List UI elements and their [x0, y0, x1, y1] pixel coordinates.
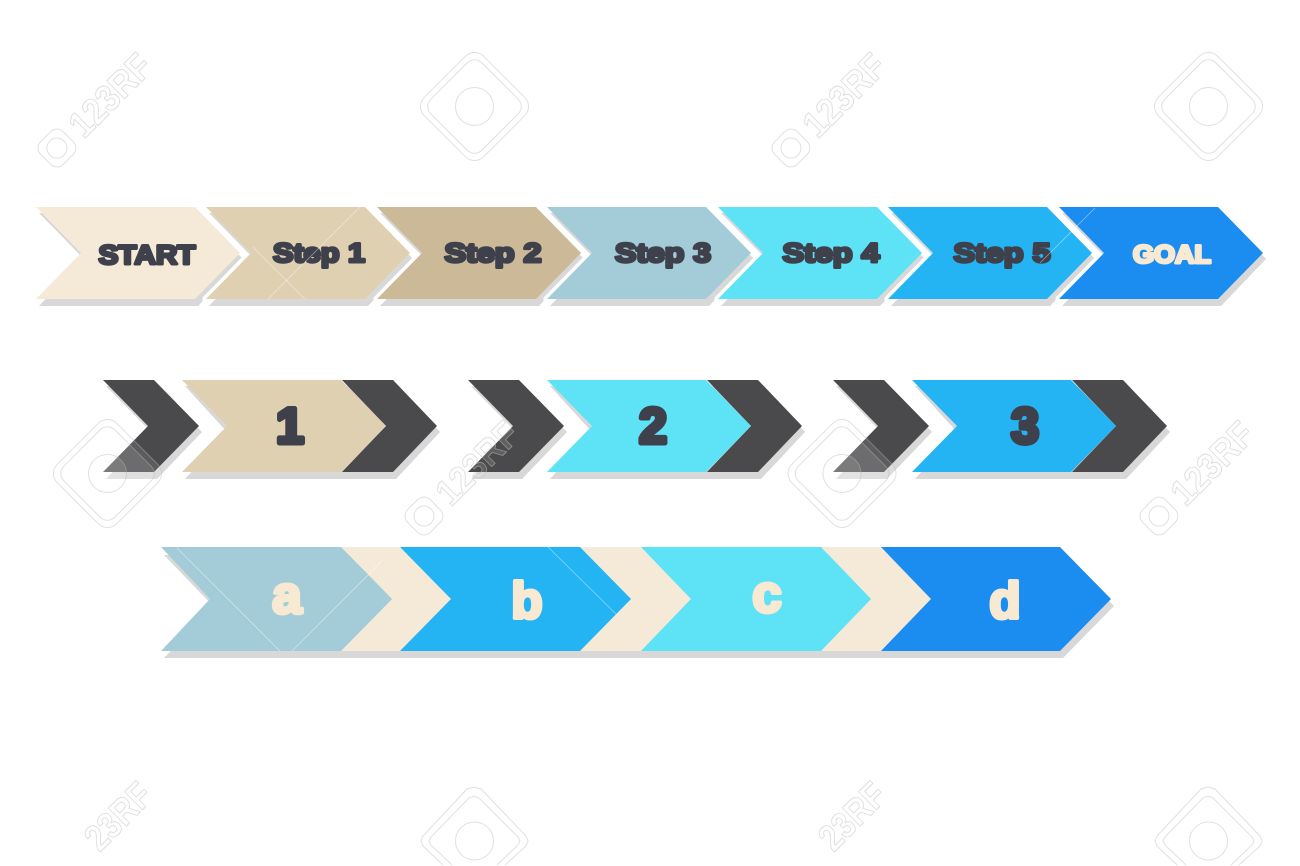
arrow: Step 5: [888, 207, 1095, 306]
arrow group: b: b: [511, 572, 543, 629]
arrow group: 3: 3: [1011, 398, 1039, 454]
arrow: Step 3: Step 3: [615, 238, 711, 268]
arrow group: a: [161, 547, 1114, 658]
watermark: logo middle 2: [1134, 414, 1262, 542]
arrow: Step 1: Step 1: [273, 238, 365, 268]
watermark: egg middle 1: [48, 414, 167, 533]
arrow group: c: c: [752, 565, 782, 624]
panel: top process row, start to goal: [36, 207, 1266, 306]
arrow group: 1: 1: [276, 398, 304, 454]
watermark: egg bottom 1, cut by the frame: [421, 787, 528, 865]
watermark: egg top 1: [415, 47, 534, 166]
arrow: Step 2: [377, 207, 584, 306]
arrow: Step 2: Step 2: [444, 238, 542, 268]
arrow: Step 1: [206, 207, 413, 306]
watermark: logo bottom 2, cut by the frame: 23RF: [810, 774, 894, 858]
arrow: Step 4: [718, 207, 925, 306]
arrow: Step 4: Step 4: [782, 238, 880, 268]
arrow: GOAL: [1059, 207, 1266, 306]
watermark: logo bottom left, cut by the frame: 23RF: [76, 774, 160, 858]
watermark: egg bottom 2, cut by the frame: [1155, 787, 1262, 865]
panel: middle row, numbered arrows: [103, 380, 1170, 479]
watermark: egg top 2: [1149, 47, 1268, 166]
watermark: logo middle 1: [399, 414, 527, 542]
watermark: logo top 2: 123RF: [795, 46, 894, 145]
watermark: logo top left: [32, 46, 160, 174]
arrow: START: [36, 207, 243, 306]
watermark: egg middle 2: [783, 414, 901, 533]
arrow: Step 3: [547, 207, 754, 306]
watermark: logo top left: 123RF: [61, 46, 160, 145]
panel: bottom row, lettered arrows: [161, 547, 1114, 658]
watermark: logo middle 2: 123RF: [1163, 414, 1262, 513]
arrow group: 2: [468, 380, 805, 479]
arrow group: 3: [833, 380, 1170, 479]
watermark: logo top 2: [766, 46, 894, 174]
arrow group: c: [641, 547, 931, 651]
arrow group: b: [400, 547, 691, 651]
arrow group: a: a: [272, 566, 302, 625]
watermark: logo middle 1: 123RF: [428, 414, 527, 513]
arrow: Step 5: Step 5: [954, 238, 1050, 268]
arrow: GOAL: GOAL: [1133, 241, 1211, 269]
arrow group: 2: 2: [639, 398, 667, 454]
arrow group: d: d: [989, 572, 1021, 629]
arrow: START: START: [98, 240, 196, 270]
arrow group: d: [881, 547, 1111, 651]
arrow group: 1: [103, 380, 440, 479]
